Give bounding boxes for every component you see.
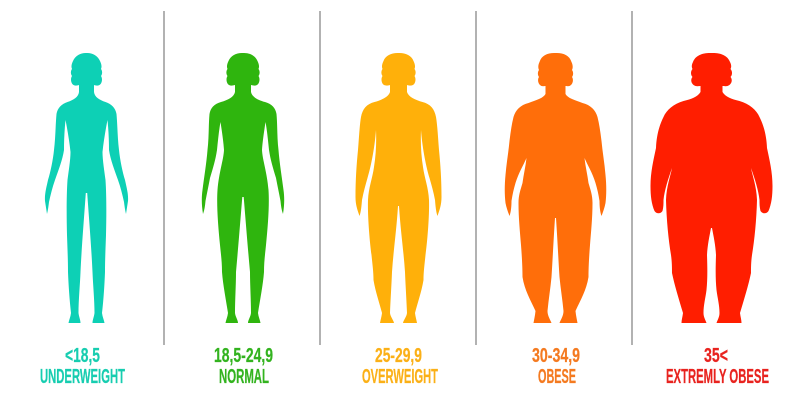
- label: underweight: [40, 345, 125, 388]
- label: normal: [214, 345, 273, 388]
- label: obese: [532, 345, 580, 388]
- label: obese: OBESE: [538, 366, 576, 388]
- label: overweight: [362, 345, 438, 388]
- label: extremely obese: [666, 345, 769, 388]
- label: obese: 30-34,9: [532, 345, 580, 367]
- label: overweight: 25-29,9: [375, 345, 422, 367]
- panel: normal figure: [202, 53, 284, 323]
- label: extremely obese: 35<: [704, 345, 728, 367]
- label: overweight: OVERWEIGHT: [362, 366, 438, 388]
- label: normal: NORMAL: [219, 366, 269, 388]
- panel: extremely obese figure: [650, 53, 772, 323]
- panel: obese figure: [505, 53, 606, 323]
- label: underweight: <18,5: [65, 345, 100, 367]
- panel: overweight figure: [356, 53, 442, 323]
- label: normal: 18,5-24,9: [214, 345, 273, 367]
- panel: underweight figure: [45, 53, 128, 323]
- label: underweight: UNDERWEIGHT: [40, 366, 125, 388]
